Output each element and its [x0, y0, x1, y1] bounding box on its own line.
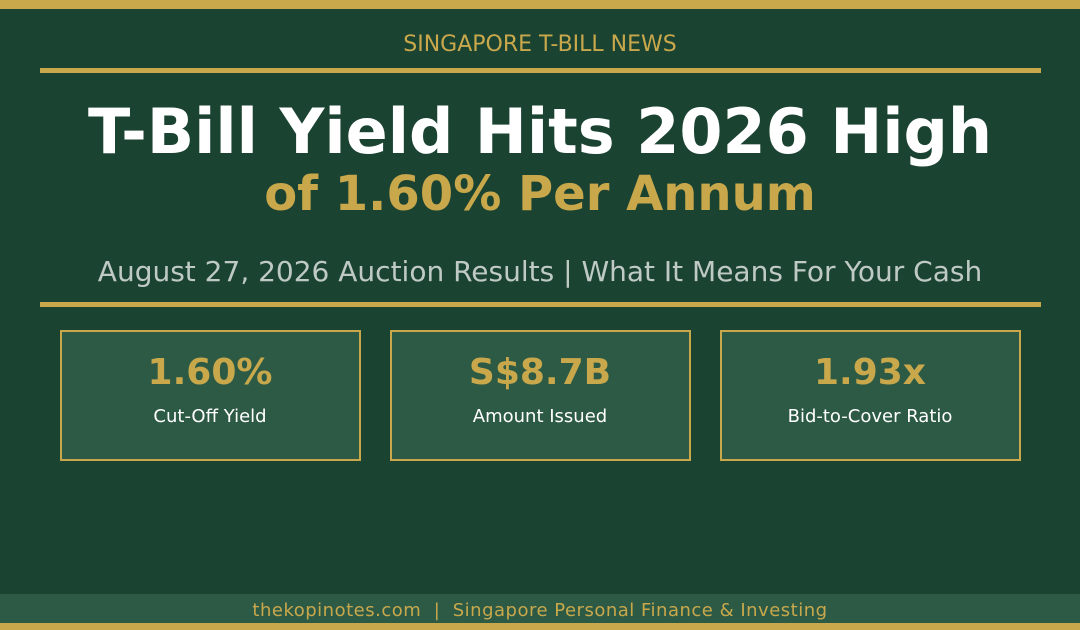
footer text: thekopinotes.com | Singapore Personal Finance & Investing: [252, 600, 828, 621]
subtitle: of 1.60% Per Annum: [264, 166, 816, 222]
value: S$8.7B: S$8.7B: [469, 352, 611, 393]
stat card: cut-off yield: [61, 331, 360, 460]
stat card: bid-to-cover ratio: [721, 331, 1020, 460]
value: 1.60%: 1.60%: [148, 352, 272, 393]
title: T-Bill Yield Hits 2026 High: [88, 95, 992, 168]
stat card: amount issued: [391, 331, 690, 460]
eyebrow: Singapore T-Bill News: SINGAPORE T-BILL NEWS: [403, 32, 677, 57]
value: 1.93x: 1.93x: [814, 352, 926, 393]
footer: [0, 594, 1080, 630]
label: Bid-to-Cover Ratio: Bid-to-Cover Ratio: [788, 406, 952, 427]
label: Cut-Off Yield: Cut-Off Yield: [153, 406, 267, 427]
date and tagline: August 27, 2026 Auction Results | What It Means For Your Cash: [98, 255, 982, 288]
label: Amount Issued: Amount Issued: [473, 406, 607, 427]
